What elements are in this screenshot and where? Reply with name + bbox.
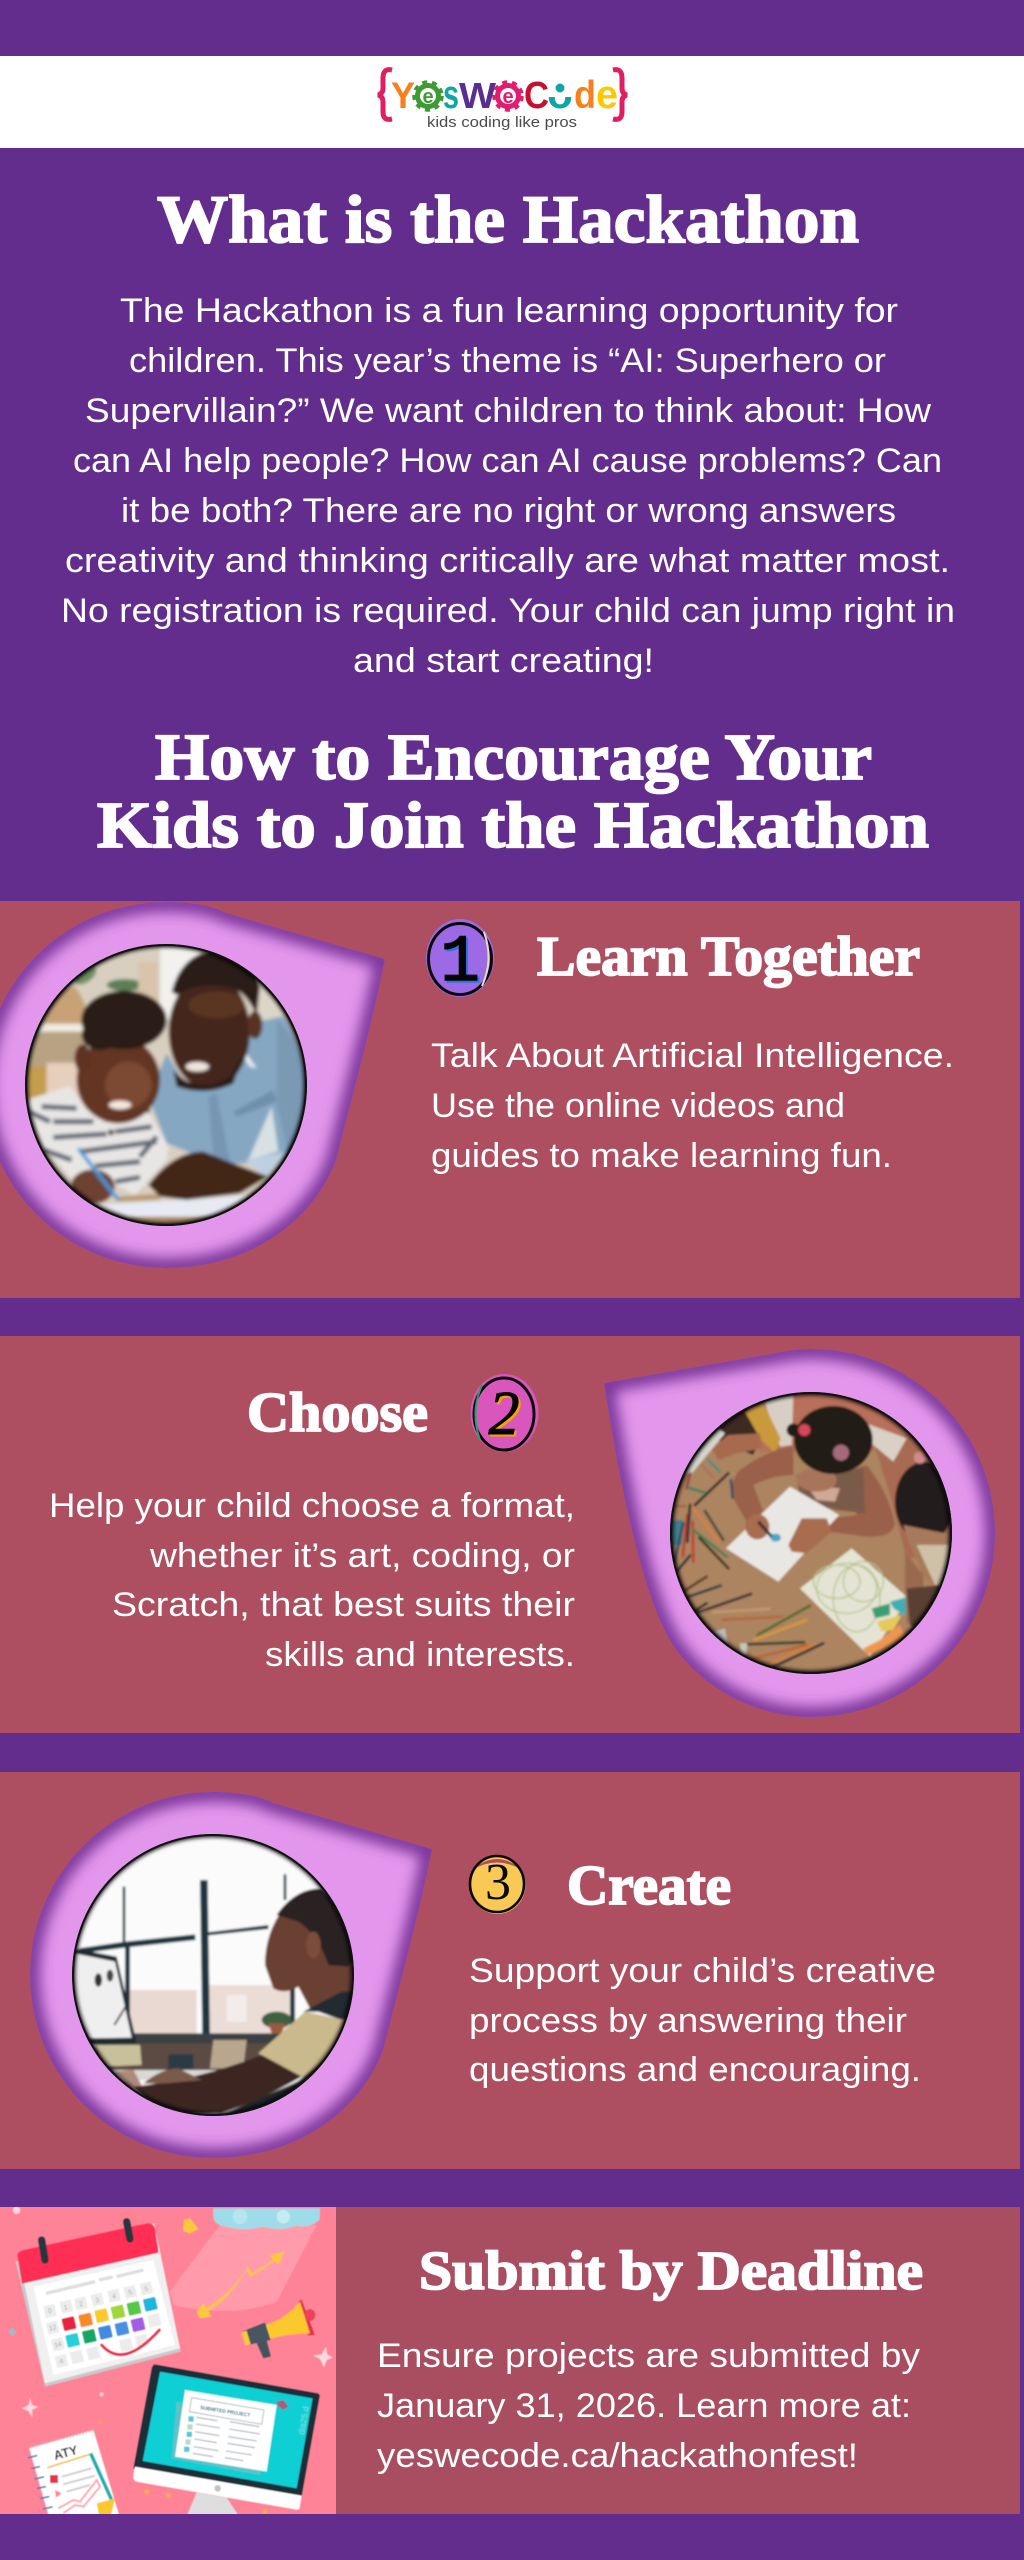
intro paragraph: and start creating!	[353, 642, 654, 680]
logo: YesWeCode: e	[502, 86, 514, 108]
logo: YesWeCode	[378, 69, 627, 131]
photo: father and son	[25, 944, 307, 1226]
intro paragraph: Supervillain?” We want children to think about: How	[85, 392, 931, 430]
calendar grid: 1	[63, 2304, 69, 2312]
intro paragraph: can AI help people? How can AI cause problems? Can	[73, 442, 942, 480]
body: step 3: process by answering their	[469, 2002, 907, 2040]
logo: YesWeCode: o	[547, 69, 573, 118]
intro paragraph: it be both? There are no right or wrong answers	[121, 492, 896, 530]
calendar grid: 5	[128, 2289, 133, 2297]
photo: woman at computer	[72, 1834, 354, 2116]
body: step 3: questions and encouraging.	[469, 2051, 921, 2089]
calendar grid: 4	[112, 2293, 117, 2301]
calendar body	[15, 2260, 181, 2387]
calendar grid: 3	[95, 2297, 100, 2305]
logo: YesWeCode: W	[459, 75, 496, 116]
number badge 3	[470, 1854, 526, 1914]
intro paragraph: The Hackathon is a fun learning opportunity for	[120, 292, 898, 330]
panel: step 1 learn together	[0, 901, 1020, 1298]
calendar grid: 12	[48, 2324, 57, 2333]
body: step 1: Talk About Artificial Intelligence.	[431, 1037, 954, 1075]
logo: YesWeCode: d	[574, 74, 596, 117]
yellow arrow	[203, 2252, 284, 2313]
body: step 2	[49, 1487, 575, 1674]
body: submit: Ensure projects are submitted by	[377, 2337, 921, 2375]
calendar grid: 2	[79, 2301, 84, 2308]
photo: children drawing	[670, 1392, 952, 1674]
logo: YesWeCode: kids coding like pros	[427, 114, 577, 131]
body: step 2: whether it’s art, coding, or	[149, 1537, 575, 1575]
number badge 1	[426, 919, 494, 1002]
body: step 1: guides to make learning fun.	[431, 1137, 892, 1175]
body: step 3	[469, 1952, 936, 2089]
number badge 1: 1	[440, 925, 480, 1000]
logo: YesWeCode: Y	[391, 75, 415, 116]
number badge 2	[470, 1374, 538, 1452]
blob frame 2	[604, 1349, 995, 1717]
number badge 3: 3	[485, 1854, 511, 1911]
notepad: ATY	[52, 2443, 80, 2463]
body: step 2: Help your child choose a format,	[49, 1487, 575, 1525]
body: submit: January 31, 2026. Learn more at:	[377, 2387, 911, 2425]
notepad	[28, 2430, 121, 2520]
calendar grid: 0	[48, 2308, 53, 2315]
monitor: SUBMITED PROJECT	[200, 2405, 251, 2419]
number badge 2: 2	[488, 1380, 520, 1448]
calendar grid: 14	[54, 2341, 63, 2349]
body: submit: yeswecode.ca/hackathonfest!	[377, 2437, 858, 2475]
logo: YesWeCode: e	[422, 86, 434, 108]
blob frame 1	[0, 902, 385, 1268]
heading: How to Encourage: Kids to Join the Hackathon	[97, 789, 929, 862]
intro paragraph: children. This year’s theme is “AI: Superhero or	[129, 342, 886, 380]
body: step 3: Support your child’s creative	[469, 1952, 936, 1990]
heading: Submit by Deadline: Submit by Deadline	[419, 2240, 923, 2301]
body: submit	[377, 2337, 921, 2475]
intro paragraph: No registration is required. Your child can jump right in	[61, 592, 955, 630]
blob frame 3	[30, 1792, 432, 2158]
megaphone	[241, 2299, 315, 2358]
heading: How to Encourage	[97, 721, 929, 862]
logo: YesWeCode: s	[443, 73, 459, 117]
panel: submit by deadline	[0, 2202, 1020, 2520]
heading: How to Encourage: How to Encourage Your	[155, 721, 872, 794]
monitor: dia25.d	[296, 2405, 311, 2435]
heading: Choose: Choose	[247, 1382, 428, 1444]
body: step 1	[431, 1037, 954, 1175]
monitor	[133, 2364, 320, 2520]
cloud and beam	[170, 2225, 317, 2311]
calendar grid	[43, 2281, 162, 2368]
heading: Create: Create	[567, 1855, 731, 1917]
number badge 1: 1	[442, 927, 482, 1002]
intro paragraph: creativity and thinking critically are what matter most.	[65, 542, 950, 580]
illustration: calendar, computer and megaphone	[0, 2202, 343, 2520]
logo: YesWeCode: C	[524, 75, 549, 117]
body: step 2: skills and interests.	[265, 1636, 575, 1674]
logo: YesWeCode: e	[596, 73, 618, 117]
intro paragraph	[61, 292, 955, 680]
calendar grid: 5	[144, 2286, 149, 2293]
body: step 2: Scratch, that best suits their	[112, 1586, 575, 1624]
logo band	[0, 56, 1024, 148]
title: What is the Hackathon: What is the Hackathon	[157, 181, 859, 257]
body: step 1: Use the online videos and	[431, 1087, 845, 1125]
heading: Learn Together: Learn Together	[537, 926, 920, 988]
calendar grid: 4	[59, 2358, 64, 2366]
panel: step 2 choose	[0, 1336, 1020, 1733]
panel: step 3 create	[0, 1772, 1020, 2169]
number badge 2: 2	[490, 1382, 522, 1450]
